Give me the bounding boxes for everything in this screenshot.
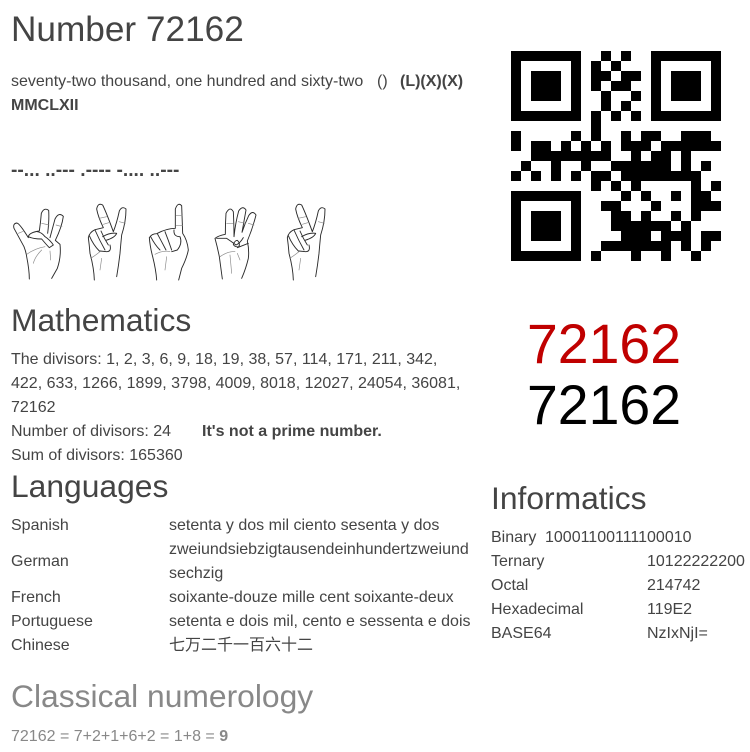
panel: mathematics bbox=[11, 302, 460, 464]
french row: French bbox=[11, 589, 61, 606]
portuguese row bbox=[11, 613, 471, 630]
chinese row: 七万二千一百六十二 bbox=[169, 637, 313, 654]
heading: mathematics: Mathematics bbox=[11, 302, 191, 338]
binary row: Binary bbox=[491, 529, 536, 546]
divisors list: 422, 633, 1266, 1899, 3798, 4009, 8018, 12027, 24054, 36081, bbox=[11, 375, 460, 392]
spanish row bbox=[11, 517, 439, 534]
panel: informatics: 10001100111100010 bbox=[545, 529, 692, 546]
chinese row bbox=[11, 636, 313, 654]
number in words and roman numerals: MMCLXII bbox=[11, 97, 79, 114]
prime status: It's not a prime number. bbox=[202, 423, 382, 440]
divisors list: The divisors: 1, 2, 3, 6, 9, 18, 19, 38, 57, 114, 171, 211, 342, bbox=[11, 351, 437, 368]
spanish row: setenta y dos mil ciento sesenta y dos bbox=[169, 517, 439, 534]
panel: informatics bbox=[491, 480, 745, 642]
sum of divisors: Sum of divisors: 165360 bbox=[11, 447, 183, 464]
ternary row: Ternary bbox=[491, 553, 544, 570]
hexadecimal row bbox=[491, 601, 692, 618]
heading: languages: Languages bbox=[11, 468, 168, 504]
number of divisors: Number of divisors: 24 bbox=[11, 423, 171, 440]
number in words and roman numerals: () bbox=[377, 73, 388, 90]
german row: zweiundsiebzigtausendeinhundertzweiund bbox=[169, 541, 469, 558]
panel: classical numerology bbox=[11, 678, 313, 745]
number in words and roman numerals: (L)(X)(X) bbox=[400, 73, 463, 90]
portuguese row: Portuguese bbox=[11, 613, 93, 630]
german row: German bbox=[11, 553, 69, 570]
spanish row: Spanish bbox=[11, 517, 69, 534]
base64 row: BASE64 bbox=[491, 625, 551, 642]
octal row: 214742 bbox=[647, 577, 700, 594]
portuguese row: setenta e dois mil, cento e sessenta e dois bbox=[169, 613, 471, 630]
base64 row: NzIxNjI= bbox=[647, 625, 708, 642]
binary row bbox=[491, 529, 692, 546]
chinese row: Chinese bbox=[11, 637, 70, 654]
panel: languages bbox=[11, 468, 471, 654]
number in words and roman numerals bbox=[11, 73, 463, 114]
large number black: 72162 bbox=[527, 374, 681, 436]
number in words and roman numerals: seventy-two thousand, one hundred and sixty-two bbox=[11, 73, 363, 90]
german row bbox=[11, 541, 469, 582]
hexadecimal row: 119E2 bbox=[647, 601, 692, 618]
numerology sum: 72162 = 7+2+1+6+2 = 1+8 = 9 bbox=[11, 728, 228, 745]
french row: soixante-douze mille cent soixante-deux bbox=[169, 589, 454, 606]
hexadecimal row: Hexadecimal bbox=[491, 601, 583, 618]
title: Number 72162 bbox=[11, 10, 244, 49]
divisors list bbox=[11, 351, 460, 416]
german row: sechzig bbox=[169, 565, 223, 582]
morse code: --... ..--- .---- -.... ..--- bbox=[11, 160, 179, 181]
ternary row: 10122222200 bbox=[647, 553, 745, 570]
octal row bbox=[491, 577, 700, 594]
base64 row bbox=[491, 625, 708, 642]
heading: classical numerology: Classical numerology bbox=[11, 678, 313, 714]
french row bbox=[11, 589, 454, 606]
ternary row bbox=[491, 553, 745, 570]
heading: informatics: Informatics bbox=[491, 480, 646, 516]
octal row: Octal bbox=[491, 577, 528, 594]
large number red: 72162 bbox=[527, 313, 681, 375]
divisors list: 72162 bbox=[11, 399, 56, 416]
sign language hands bbox=[13, 204, 326, 280]
QR code bbox=[511, 51, 721, 261]
